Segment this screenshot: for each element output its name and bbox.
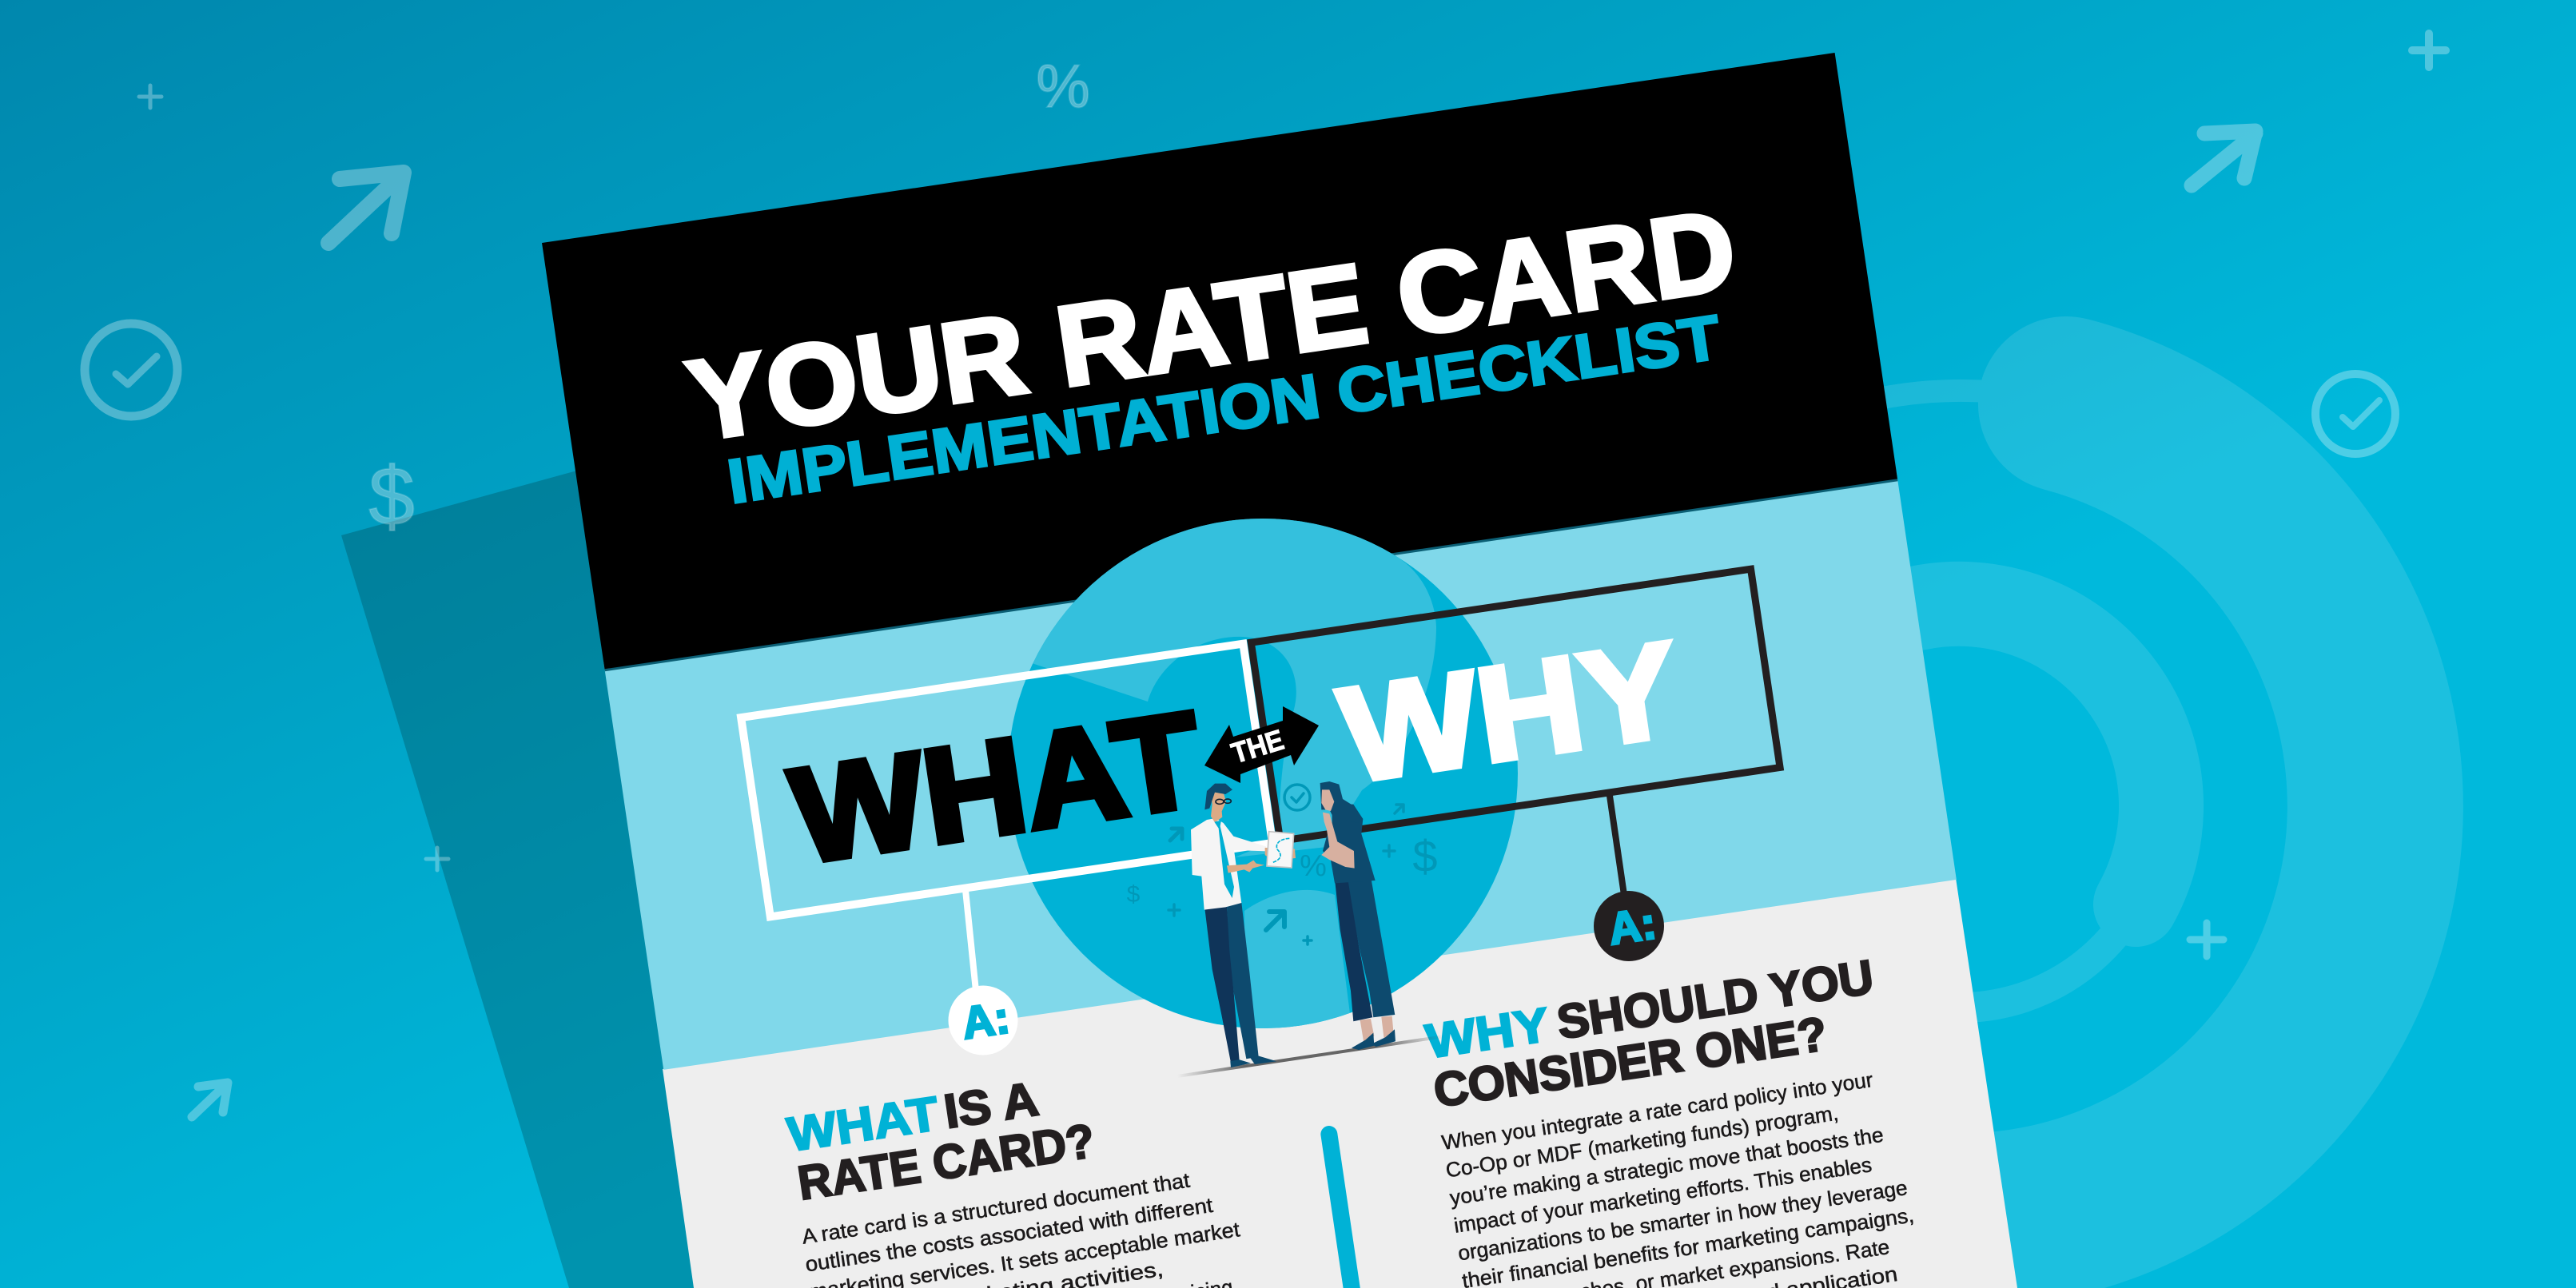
divider pill [1329,1135,1359,1288]
heading: why should you consider one: CONSIDER ONE? [1431,1007,1830,1117]
background icons [85,34,2446,1117]
text block: what is a rate card: outlines the costs associated with different [803,1193,1215,1276]
illustration: woman thinking [1320,781,1395,1050]
text block: why should you consider one: organizations to be smarter in how they leverage [1456,1175,1909,1265]
text block: what is a rate card [799,1162,1250,1288]
icon: top right arrow [2192,131,2255,185]
text block: what is a rate card: A rate card is a structured document that [800,1168,1192,1249]
background swirl logo [1798,391,2375,1222]
badge: why answer [1594,891,1664,961]
heading: what is a rate card [784,1064,1098,1210]
ground shadow [1177,1036,1444,1076]
what and why boxes [741,569,1780,916]
big circle with swirl: % [1300,849,1327,883]
icon: check circle left [85,324,177,416]
text block: why should you consider one [1440,1064,1924,1288]
badge: what answer [948,986,1018,1055]
man tie [1214,821,1234,898]
double arrow with THE: THE [1228,723,1288,769]
man hand pointing [1227,861,1264,873]
heading: why should you consider one: SHOULD YOU [1554,950,1877,1049]
icon: top right plus [2412,34,2446,67]
word: WHAT: WHAT [782,683,1210,892]
panel: light blue section [603,471,1957,1070]
word: WHY: WHY [1332,613,1689,811]
heading: what is a rate card: WHAT [784,1087,942,1162]
page drop shadow [341,431,1039,1288]
heading: why should you consider one [1422,950,1884,1118]
man shirt [1191,818,1267,910]
panel: grey section [663,878,2017,1288]
text block: why should you consider one: you’re making a strategic move that boosts the [1448,1123,1885,1210]
panel: page background [542,53,2013,1288]
woman legs and shoes [1352,1016,1395,1050]
double arrow with THE [1204,706,1319,783]
woman trousers [1335,877,1395,1021]
woman blouse [1323,805,1376,883]
text block: why should you consider one: impact of your marketing efforts. This enables [1452,1152,1873,1238]
icon: check circle right [2315,374,2395,454]
connector: why [1610,796,1624,895]
icon: plus middle left [426,848,448,870]
panel: black header [542,53,1897,670]
faint icons in circle [1169,785,1403,944]
subtitle: IMPLEMENTATION CHECKLIST [723,301,1725,517]
badge: what answer: A: [958,992,1013,1048]
why box [1251,569,1780,841]
text block: why should you consider one: Co-Op or MDF (marketing funds) program, [1444,1101,1840,1183]
icon: small arrow bottom left [192,1083,228,1117]
woman face and arm [1321,789,1355,869]
tablet [1265,832,1296,868]
heading: what is a rate card: RATE CARD? [794,1114,1098,1210]
big circle with swirl: $ [1127,881,1141,908]
title: YOUR RATE CARD [679,186,1744,465]
icon: plus lower right [2190,923,2224,956]
man trousers [1204,902,1276,1067]
badge: why answer: A: [1605,897,1659,954]
illustration: man holding tablet [1191,784,1296,1067]
heading: why should you consider one: WHY [1422,997,1553,1068]
big circle with swirl [1010,519,1518,1028]
heading: what is a rate card: IS A [941,1071,1041,1139]
icon: large arrow [328,173,404,243]
woman hair [1320,781,1363,825]
big circle with swirl: $ [1412,831,1438,881]
what box [741,644,1272,916]
man face and hair [1204,784,1232,822]
text block: why should you consider one: When you integrate a rate card policy into your [1440,1067,1875,1155]
connector: what [966,890,976,991]
icon: percent sign: % [1036,53,1090,121]
icon: dollar sign: $ [368,451,415,543]
icon: plus top left [139,85,161,108]
